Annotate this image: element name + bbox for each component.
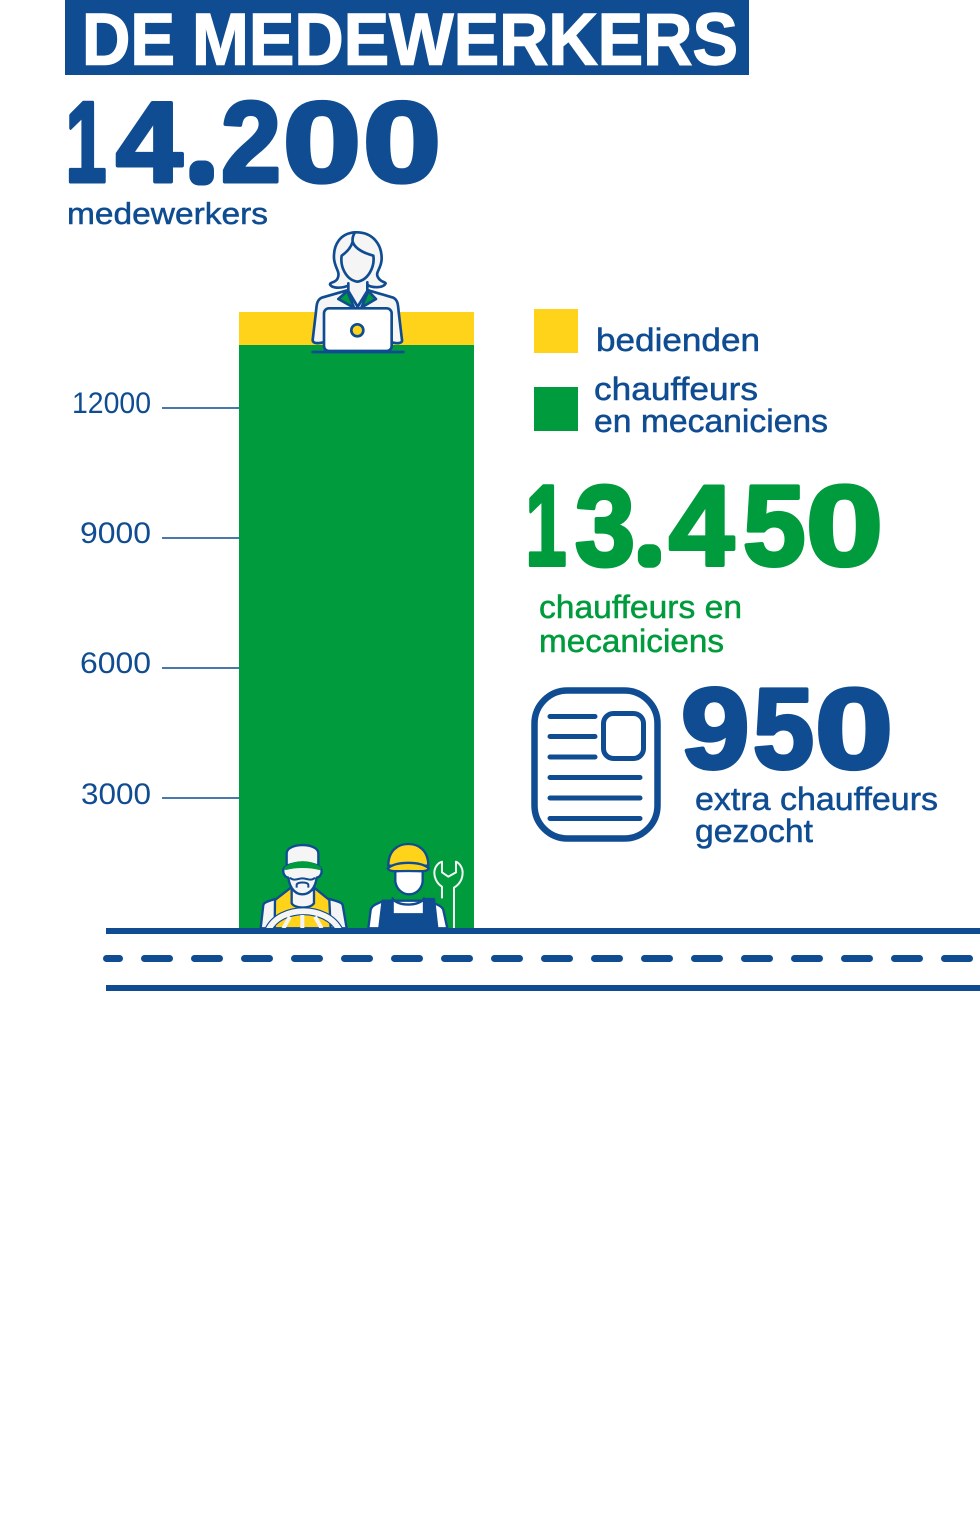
icon: newspaper [534,690,658,838]
number: 950: 5 [753,666,814,793]
number: 13.450: . [644,524,655,568]
label: extra chauffeurs gezocht: gezocht [695,813,813,849]
total label: medewerkers [67,196,268,231]
axis: scale labels and ticks: 3000 [81,778,151,811]
number: 13.450: 4 [669,463,734,590]
total number: 14.200: 0 [283,80,361,206]
total number: 14.200: 4 [116,80,182,206]
number: 950: 0 [815,666,893,793]
total number: 14.200: 0 [363,80,441,206]
axis: scale labels and ticks: 9000 [80,517,151,550]
legend: chauffeurs [594,371,758,407]
legend: en mecaniciens [594,403,828,439]
road [103,928,980,991]
number: 13.450: 5 [743,463,806,590]
title: MEDEWERKERS [192,0,738,80]
axis: scale labels and ticks: 6000 [80,647,151,680]
total number: 14.200: 1 [66,80,106,206]
icon: mechanic with wrench [368,844,463,928]
legend [534,309,828,439]
label: chauffeurs en mecaniciens [539,589,742,659]
number: 13.450: 1 [526,463,566,590]
number: 950: 9 [681,666,750,793]
label: chauffeurs en mecaniciens: chauffeurs en [539,589,742,625]
icon: office employee with laptop [313,232,403,352]
total number: 14.200: . [196,141,207,185]
number: 13.450: 3 [575,463,635,590]
axis: scale labels and ticks: 12000 [72,387,151,420]
number: 13.450: 0 [806,463,883,590]
label: chauffeurs en mecaniciens: mecaniciens [539,623,724,659]
label: extra chauffeurs gezocht: extra chauffeurs [695,781,938,817]
legend: bedienden [596,322,760,358]
stacked bar chart [239,312,474,930]
title: DE [82,0,175,80]
total number: 14.200: 2 [221,80,281,206]
axis: scale labels and ticks [72,387,239,811]
label: extra chauffeurs gezocht [695,781,938,849]
icon: bus driver at steering wheel [261,845,347,930]
